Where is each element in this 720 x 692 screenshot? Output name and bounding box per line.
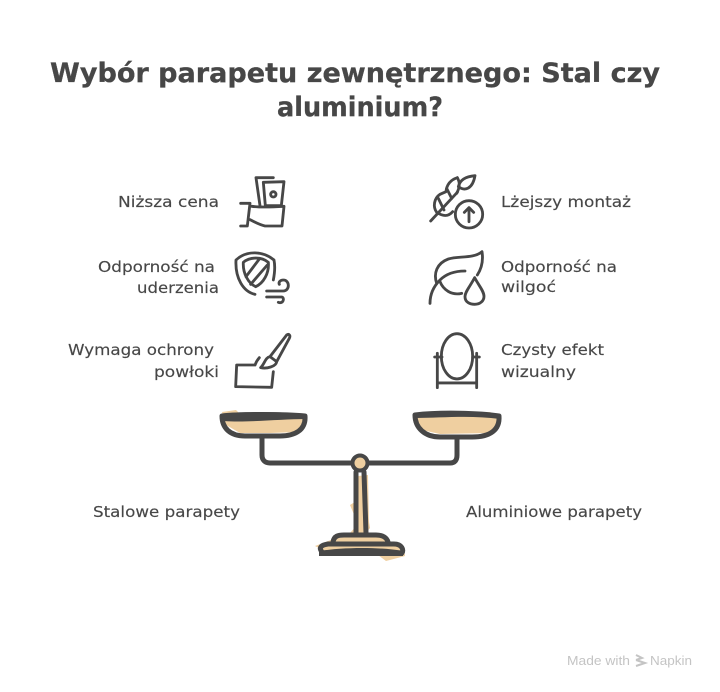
base [333, 535, 388, 542]
label: odporność na uderzenia: uderzenia [137, 279, 219, 297]
label: czysty efekt wizualny: wizualny [501, 363, 576, 381]
icon: hand holding money [241, 178, 284, 226]
label: stalowe parapety: Stalowe parapety [93, 503, 240, 521]
icon: shield with wind [236, 253, 288, 303]
column [356, 472, 366, 533]
icon: leaf with water drop [430, 252, 484, 304]
label: odporność na wilgoć: Odporność na [501, 258, 617, 276]
pivot [352, 456, 368, 470]
label: aluminiowe parapety: Aluminiowe parapety [466, 503, 642, 521]
watermark [567, 654, 692, 668]
label: czysty efekt wizualny: Czysty efekt [501, 341, 604, 359]
label: odporność na wilgoć: wilgoć [501, 278, 556, 296]
label: odporność na uderzenia: Odporność na [98, 258, 215, 276]
icon: paint brush and surface [236, 334, 290, 387]
balance scale [221, 410, 501, 561]
right pan [415, 413, 499, 437]
left pan [222, 414, 305, 436]
label: lżejszy montaż: Lżejszy montaż [501, 193, 631, 211]
watermark: Napkin [650, 654, 692, 668]
label: niższa cena: Niższa cena [118, 193, 219, 211]
label: czysty efekt wizualny [501, 341, 604, 381]
icon: standing mirror [435, 334, 479, 388]
label: wymaga ochrony powłoki: Wymaga ochrony [68, 341, 214, 359]
title: aluminium? [277, 92, 443, 123]
beam [262, 438, 457, 463]
label: wymaga ochrony powłoki [68, 341, 219, 381]
label: odporność na wilgoć [501, 258, 617, 296]
title: Wybór parapetu zewnętrznego: Stal czy [50, 58, 660, 89]
label: wymaga ochrony powłoki: powłoki [154, 363, 219, 381]
label: odporność na uderzenia [98, 258, 219, 297]
icon: feather with up arrow [431, 176, 483, 228]
title [50, 58, 660, 123]
tan fills [222, 410, 501, 561]
watermark: Made with [567, 654, 630, 668]
